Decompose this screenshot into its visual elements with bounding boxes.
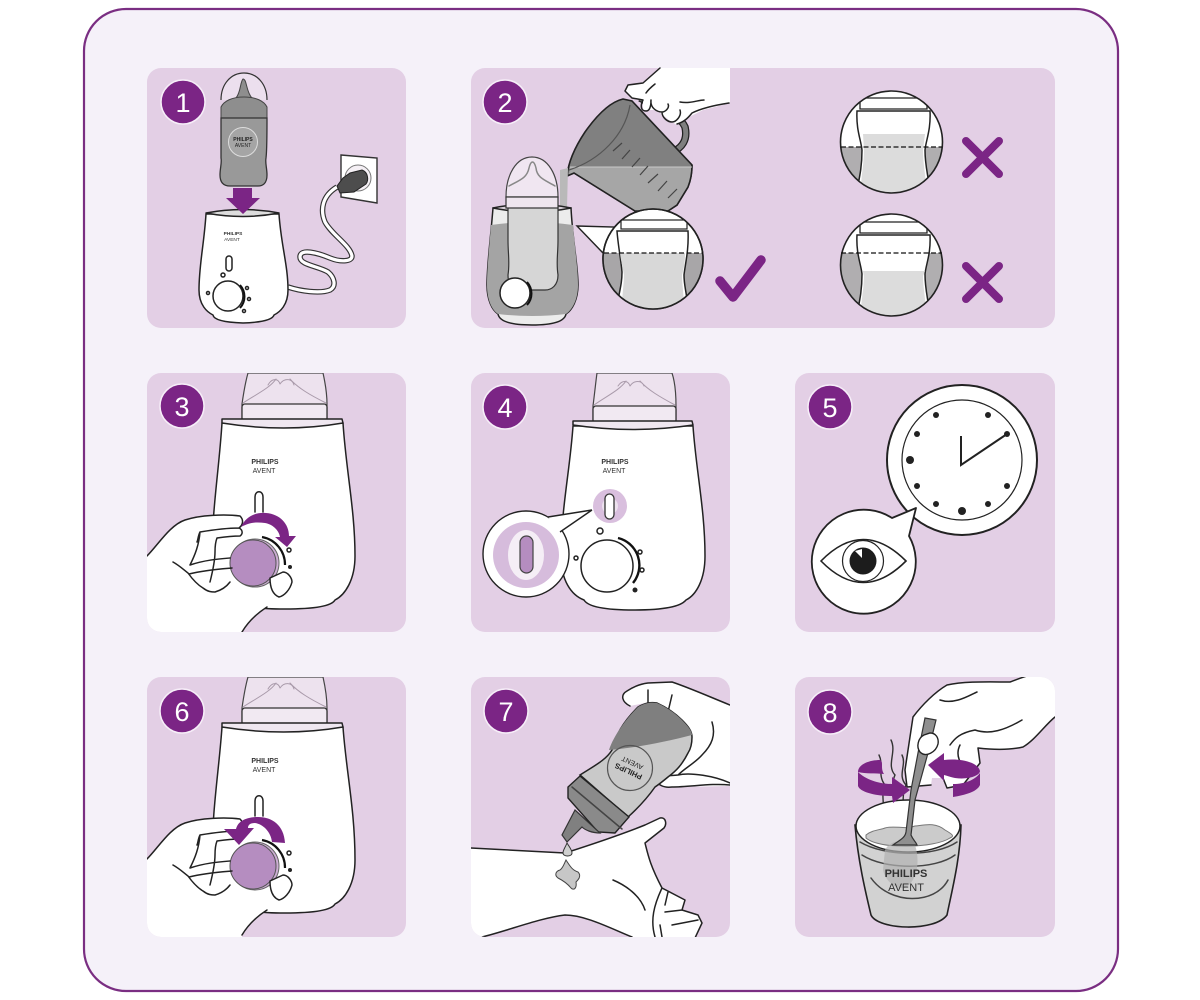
eye speech bubble <box>812 508 916 614</box>
cord <box>288 187 352 292</box>
panel background 7 <box>471 677 730 937</box>
stirring arrow left <box>858 760 910 803</box>
warmer with bottle: PHILIPS <box>251 758 279 765</box>
warmer with bottle and dial: PHILIPS <box>601 459 629 466</box>
panel: step 3 turn dial <box>147 373 406 632</box>
bottle with dome: PHILIPS <box>233 137 253 143</box>
spoon <box>893 718 936 845</box>
number badge 3 <box>160 384 204 428</box>
warmer with bottle <box>212 677 355 913</box>
wrist droplet splash <box>556 860 580 889</box>
panel: step 7 test on wrist <box>470 677 732 938</box>
panel background 2 <box>471 68 1055 328</box>
clock <box>887 385 1037 535</box>
baby food cup: PHILIPS <box>885 868 927 880</box>
bottle with dome <box>220 73 267 186</box>
zoom circle too high <box>838 214 946 324</box>
number badge 6 <box>160 689 204 733</box>
panel: step 6 turn dial back <box>147 677 406 943</box>
baby food cup <box>855 800 961 927</box>
number badge 7 <box>484 689 528 733</box>
rotation arrow clockwise <box>241 513 296 547</box>
warmer base unit: PHILIPS <box>224 231 243 237</box>
panel background 3 <box>147 373 406 632</box>
panel: step 4 light indicator <box>471 373 730 632</box>
number badge 6: 6 <box>174 697 190 727</box>
hand turning dial <box>147 515 292 632</box>
panel background 8 <box>795 677 1055 937</box>
indicator light glow <box>593 489 627 523</box>
warmer with water <box>487 157 578 325</box>
hand turning dial <box>147 818 292 943</box>
zoom bubble correct level <box>577 209 706 313</box>
check mark <box>720 260 761 297</box>
tilted bottle <box>562 703 692 842</box>
warmer with bottle: AVENT <box>253 767 276 774</box>
thumb over spoon <box>918 733 938 754</box>
panel background 5 <box>795 373 1055 632</box>
baby food cup: AVENT <box>888 882 924 894</box>
callout bubble with light <box>483 510 592 597</box>
steam lines <box>879 740 906 822</box>
number badge 1: 1 <box>175 88 191 118</box>
number badge 5 <box>808 385 852 429</box>
hand holding spoon <box>905 676 1060 788</box>
warmer base unit: AVENT <box>224 237 240 243</box>
rotation arrow counter-clockwise <box>224 817 285 845</box>
panel background 4 <box>471 373 730 632</box>
arm and hand receiving drop <box>470 818 702 938</box>
panel: step 1 place bottle in warmer <box>147 68 406 328</box>
panel: step 8 stir food <box>795 676 1060 937</box>
measuring jug <box>560 98 692 211</box>
hand holding bottle <box>623 682 732 787</box>
number badge 5: 5 <box>822 393 838 423</box>
number badge 4: 4 <box>497 393 513 423</box>
number badge 3: 3 <box>174 392 190 422</box>
number badge 1 <box>161 80 205 124</box>
zoom circle too low <box>838 91 946 200</box>
wall socket and plug <box>337 155 377 203</box>
warmer with bottle <box>212 373 355 609</box>
milk drop <box>563 843 572 856</box>
number badge 4 <box>483 385 527 429</box>
number badge 8: 8 <box>822 698 838 728</box>
warmer base unit <box>199 210 288 323</box>
number badge 8 <box>808 690 852 734</box>
number badge 2 <box>483 80 527 124</box>
panel background 6 <box>147 677 406 937</box>
warmer with bottle: PHILIPS <box>251 459 279 466</box>
stirring arrow right <box>928 753 980 797</box>
arrow down <box>226 188 260 214</box>
panel background 1 <box>147 68 406 328</box>
number badge 2: 2 <box>497 88 513 118</box>
cross mark bottom <box>966 266 999 299</box>
number badge 7: 7 <box>498 697 514 727</box>
bottle with dome: AVENT <box>235 143 251 149</box>
tilted bottle: PHILIPS <box>613 761 644 781</box>
warmer with bottle and dial <box>561 373 705 610</box>
warmer with bottle and dial: AVENT <box>603 468 626 475</box>
panel: step 5 wait and watch <box>795 373 1055 632</box>
hand holding jug <box>625 68 730 125</box>
cross mark top <box>966 141 999 174</box>
panel: step 2 pour water <box>471 68 1055 328</box>
tilted bottle: AVENT <box>620 754 645 770</box>
warmer with bottle: AVENT <box>253 468 276 475</box>
